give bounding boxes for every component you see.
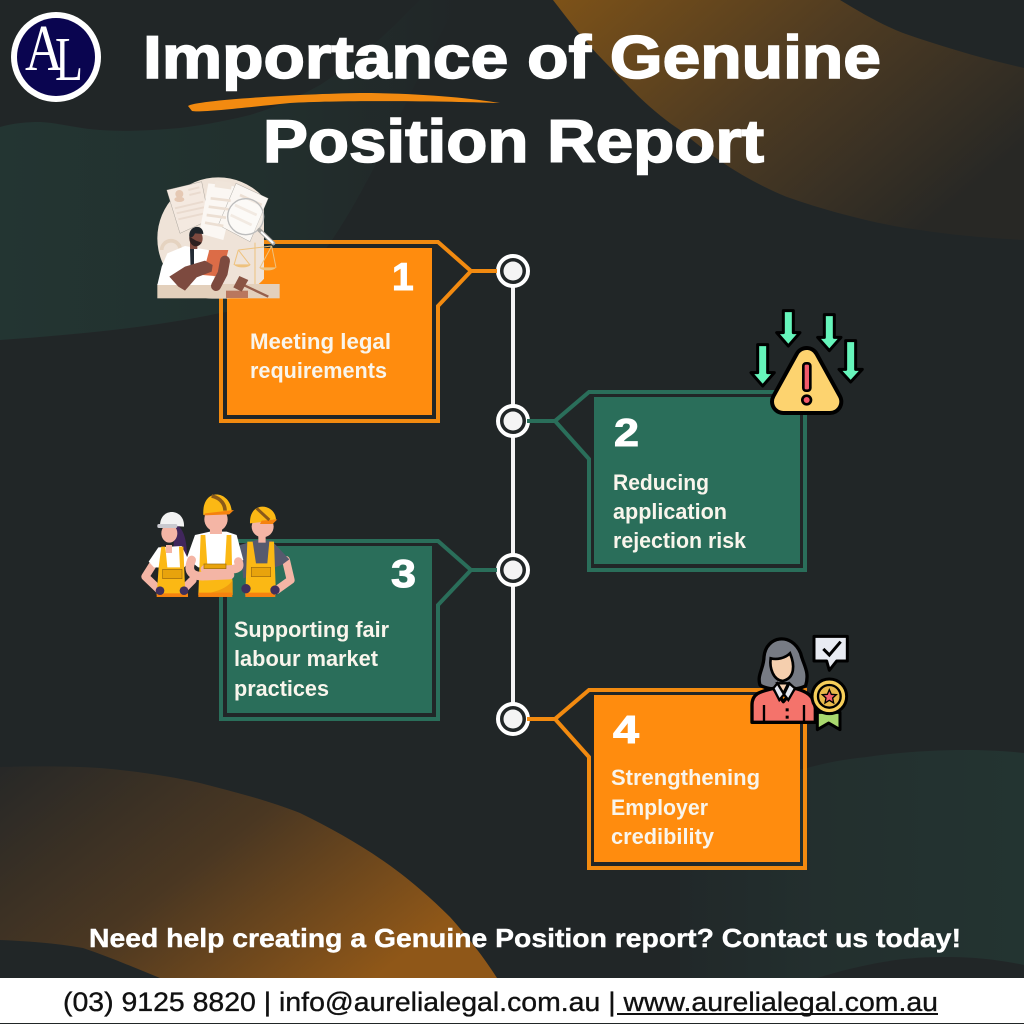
falling arrows xyxy=(751,311,862,386)
panel: step 4: 4 xyxy=(613,709,639,752)
panel: step 4: Employer xyxy=(611,795,708,820)
title brush underline xyxy=(188,93,500,111)
node 2 xyxy=(498,406,528,436)
title xyxy=(143,24,881,175)
icon: warning with arrows xyxy=(751,311,862,404)
icon: construction workers xyxy=(145,494,291,597)
worker left xyxy=(145,512,193,597)
woman xyxy=(752,639,815,722)
logo: A xyxy=(25,12,63,85)
title: Importance of Genuine xyxy=(143,24,881,91)
panel: step 3: labour market xyxy=(234,646,379,671)
medal xyxy=(812,679,847,730)
icon: lawyer with documents xyxy=(157,177,280,299)
panel: step 1 xyxy=(221,242,497,421)
title: Position Report xyxy=(263,108,764,175)
panel: step 3: practices xyxy=(234,676,329,701)
panel: step 3: Supporting fair xyxy=(234,617,389,642)
panel: step 2: 2 xyxy=(614,412,639,455)
panel: step 2 xyxy=(527,392,805,570)
worker centre xyxy=(187,494,243,597)
panel: step 1: requirements xyxy=(250,358,387,383)
panel: step 3 xyxy=(221,541,497,719)
panel: step 3: 3 xyxy=(391,553,416,596)
logo: L xyxy=(55,26,83,94)
panel: step 2: application xyxy=(613,499,727,524)
timeline xyxy=(498,256,528,734)
panel: step 4 xyxy=(527,690,805,868)
panel: step 1: Meeting legal xyxy=(250,329,391,354)
speech bubble xyxy=(814,636,847,670)
worker right xyxy=(240,507,291,597)
node 4 xyxy=(498,704,528,734)
footer contact bar: (03) 9125 8820 | info@aurelialegal.com.au | www.aurelialegal.com.au xyxy=(63,987,938,1017)
logo xyxy=(11,12,101,102)
icon: woman with approval and medal xyxy=(752,636,847,730)
panel: step 2: Reducing xyxy=(613,470,709,495)
panel: step 4: Strengthening xyxy=(611,765,760,790)
warning triangle xyxy=(783,359,830,404)
node 1 xyxy=(498,256,528,286)
node 3 xyxy=(498,555,528,585)
footer contact bar xyxy=(0,978,1024,1023)
panel: step 4: credibility xyxy=(611,824,715,849)
panel: step 1: 1 xyxy=(392,256,414,299)
panel: step 2: rejection risk xyxy=(613,528,747,553)
call to action: Need help creating a Genuine Position report? Contact us today! xyxy=(89,923,961,953)
